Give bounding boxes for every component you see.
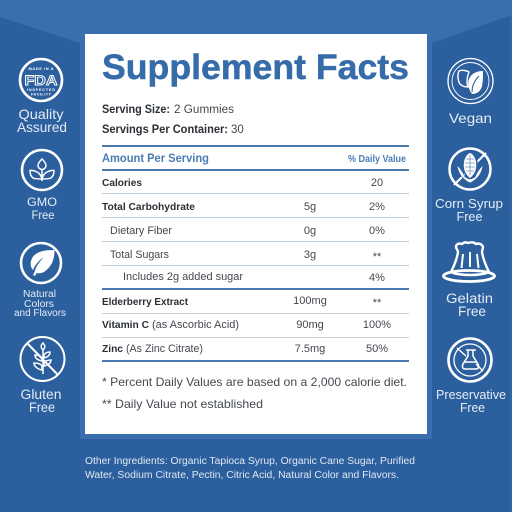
row: vitamin c	[102, 319, 391, 331]
row: dietary fiber: 0g	[304, 225, 316, 237]
row: elderberry: Elderberry Extract	[102, 296, 188, 308]
icon: FDA badge	[20, 59, 62, 101]
label: corn syrup free	[435, 196, 503, 224]
icon: GMO free	[22, 150, 62, 190]
icon: vegan	[448, 58, 493, 104]
row: calories	[102, 177, 383, 189]
row: zinc	[102, 343, 388, 355]
row: elderberry	[102, 295, 382, 309]
row: total sugars: 3g	[304, 249, 316, 261]
table rules	[102, 145, 409, 362]
label: corn syrup free: Free	[456, 209, 482, 224]
label: preservative free: Preservative	[436, 387, 506, 402]
row: total sugars: **	[373, 251, 382, 263]
row: zinc: Zinc	[102, 343, 123, 355]
icon: FDA badge: INSPECTED	[27, 88, 55, 92]
row: elderberry: 100mg	[293, 295, 327, 307]
footnotes	[102, 375, 407, 411]
footnotes: ** Daily Value not established	[102, 397, 263, 411]
label: gelatin free: Gelatin	[446, 291, 493, 306]
icon: gluten free	[20, 337, 64, 381]
row: total carbohydrate	[102, 201, 385, 213]
serving info: Servings Per Container:	[102, 124, 228, 136]
label: preservative free	[436, 387, 506, 415]
row: total carbohydrate: Total Carbohydrate	[102, 201, 195, 213]
row: zinc: 7.5mg	[295, 343, 325, 355]
label: natural colors and flavors: Natural	[23, 289, 56, 300]
row: calories: 20	[371, 177, 383, 189]
icon: FDA badge: MADE IN A	[28, 66, 54, 71]
serving info	[102, 104, 244, 136]
label: natural colors and flavors: Colors	[24, 299, 54, 310]
icon: corn free	[450, 148, 490, 190]
other ingredients: Other Ingredients: Organic Tapioca Syrup, Organic Cane Sugar, Purified	[85, 456, 415, 467]
row: vitamin c: 100%	[363, 319, 391, 331]
row: total carbohydrate: 2%	[369, 201, 385, 213]
label: gluten free: Gluten	[20, 387, 62, 402]
row: vitamin c: 90mg	[296, 319, 324, 331]
row: dietary fiber: Dietary Fiber	[110, 225, 172, 237]
row: total carbohydrate: 5g	[304, 201, 316, 213]
row: total sugars	[110, 249, 382, 263]
label: gelatin free: Free	[458, 304, 486, 319]
row: dietary fiber	[110, 225, 385, 237]
other ingredients	[85, 456, 415, 481]
serving info: 2 Gummies	[174, 104, 234, 116]
serving info: Serving Size:	[102, 104, 170, 116]
row: elderberry: **	[373, 297, 382, 309]
label: gelatin free	[446, 291, 493, 319]
label: gluten free: Free	[29, 400, 55, 415]
icon: preservative free	[448, 338, 492, 382]
other ingredients: Water, Sodium Citrate, Pectin, Citric Acid, Natural Color and Flavors.	[85, 470, 399, 481]
row: vitamin c: (as Ascorbic Acid)	[152, 319, 239, 331]
label: gluten free	[20, 387, 62, 415]
label: natural colors and flavors: and Flavors	[14, 308, 66, 319]
label: quality assured	[17, 106, 67, 135]
label: quality assured: Quality	[18, 106, 64, 122]
serving info: 30	[231, 124, 244, 136]
table header: Amount Per Serving	[102, 153, 209, 165]
row: zinc: (As Zinc Citrate)	[126, 343, 203, 355]
footnotes: * Percent Daily Values are based on a 2,000 calorie diet.	[102, 375, 407, 389]
label: natural colors and flavors	[14, 289, 66, 319]
label: preservative free: Free	[460, 400, 485, 415]
icon: natural leaf	[21, 243, 61, 283]
label: GMO free: Free	[32, 208, 55, 222]
label: GMO free	[27, 195, 57, 222]
label: GMO free: GMO	[27, 195, 57, 209]
title: Supplement Facts	[102, 48, 409, 87]
row: added sugar: Includes 2g added sugar	[123, 271, 243, 283]
row: zinc: 50%	[366, 343, 388, 355]
table header	[102, 153, 406, 165]
table header: % Daily Value	[348, 154, 406, 165]
icon: FDA badge: FDA	[24, 72, 58, 88]
panel: supplement facts	[85, 34, 427, 434]
row: added sugar	[123, 271, 385, 284]
icon: gelatin	[444, 242, 494, 282]
row: vitamin c: Vitamin C	[102, 319, 149, 331]
row: calories: Calories	[102, 178, 142, 189]
label: quality assured: Assured	[17, 119, 67, 135]
label: vegan: Vegan	[449, 110, 492, 126]
row: total sugars: Total Sugars	[110, 249, 169, 261]
label: corn syrup free: Corn Syrup	[435, 196, 503, 211]
row: added sugar: 4%	[369, 272, 385, 284]
icon: FDA badge: FACILITY	[31, 92, 51, 96]
row: dietary fiber: 0%	[369, 225, 385, 237]
